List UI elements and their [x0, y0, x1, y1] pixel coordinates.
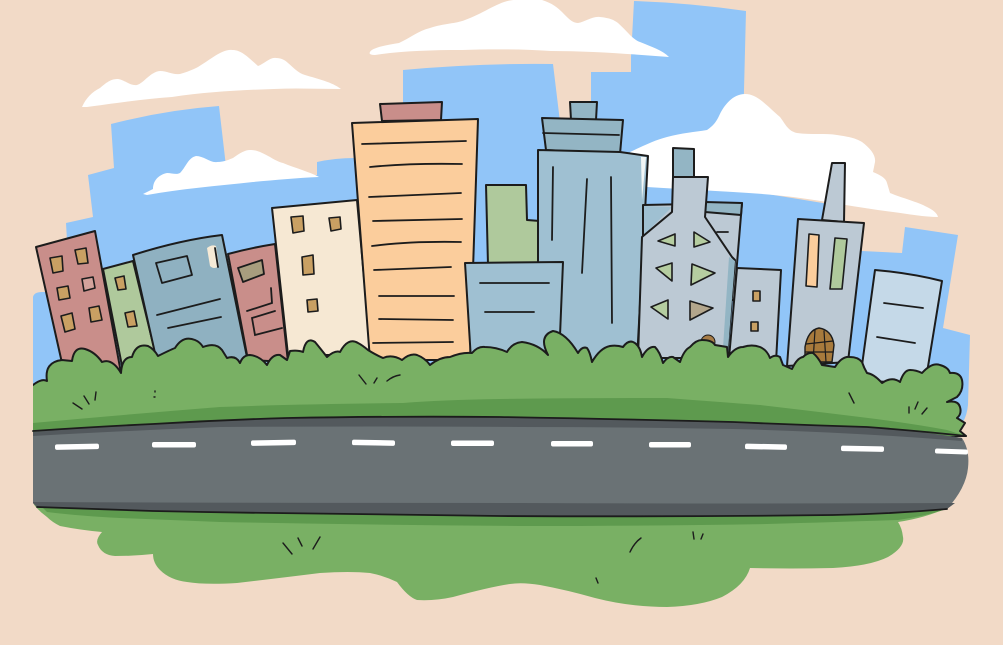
bush: shaded lower band: [33, 398, 966, 436]
building: orange tower: [352, 102, 478, 360]
bush grass ticks: [73, 375, 927, 414]
building: green behind: [486, 185, 540, 265]
building: steel blue: [133, 235, 248, 362]
building: small grey: [729, 268, 781, 362]
road: edge lines: [33, 417, 966, 436]
lower grass: [33, 490, 947, 607]
building: rear grey: [643, 202, 742, 300]
building: pink left: [36, 231, 121, 373]
building: grey gabled with triangular windows: [638, 148, 735, 358]
road: centre dashes: [55, 440, 968, 455]
cloud: small left: [143, 150, 319, 195]
cloud: top centre: [370, 0, 669, 57]
lower grass ticks: [283, 532, 703, 583]
sky silhouette: [33, 1, 970, 422]
bushes: [28, 331, 966, 436]
building: low blue: [465, 262, 563, 360]
building: cream: [272, 200, 371, 355]
road: lower kerb shade: [33, 502, 955, 516]
building: small green: [103, 261, 157, 366]
building: spire tower: [787, 163, 864, 366]
cloud: large right: [630, 94, 938, 217]
building: pale blue right: [860, 270, 942, 385]
road: [33, 417, 968, 516]
building: pink middle: [228, 244, 288, 362]
road: upper kerb shade: [33, 417, 962, 441]
lower grass: dark band: [40, 500, 947, 526]
building: tall blue with tiers: [538, 102, 648, 360]
cloud: top left: [82, 50, 341, 107]
